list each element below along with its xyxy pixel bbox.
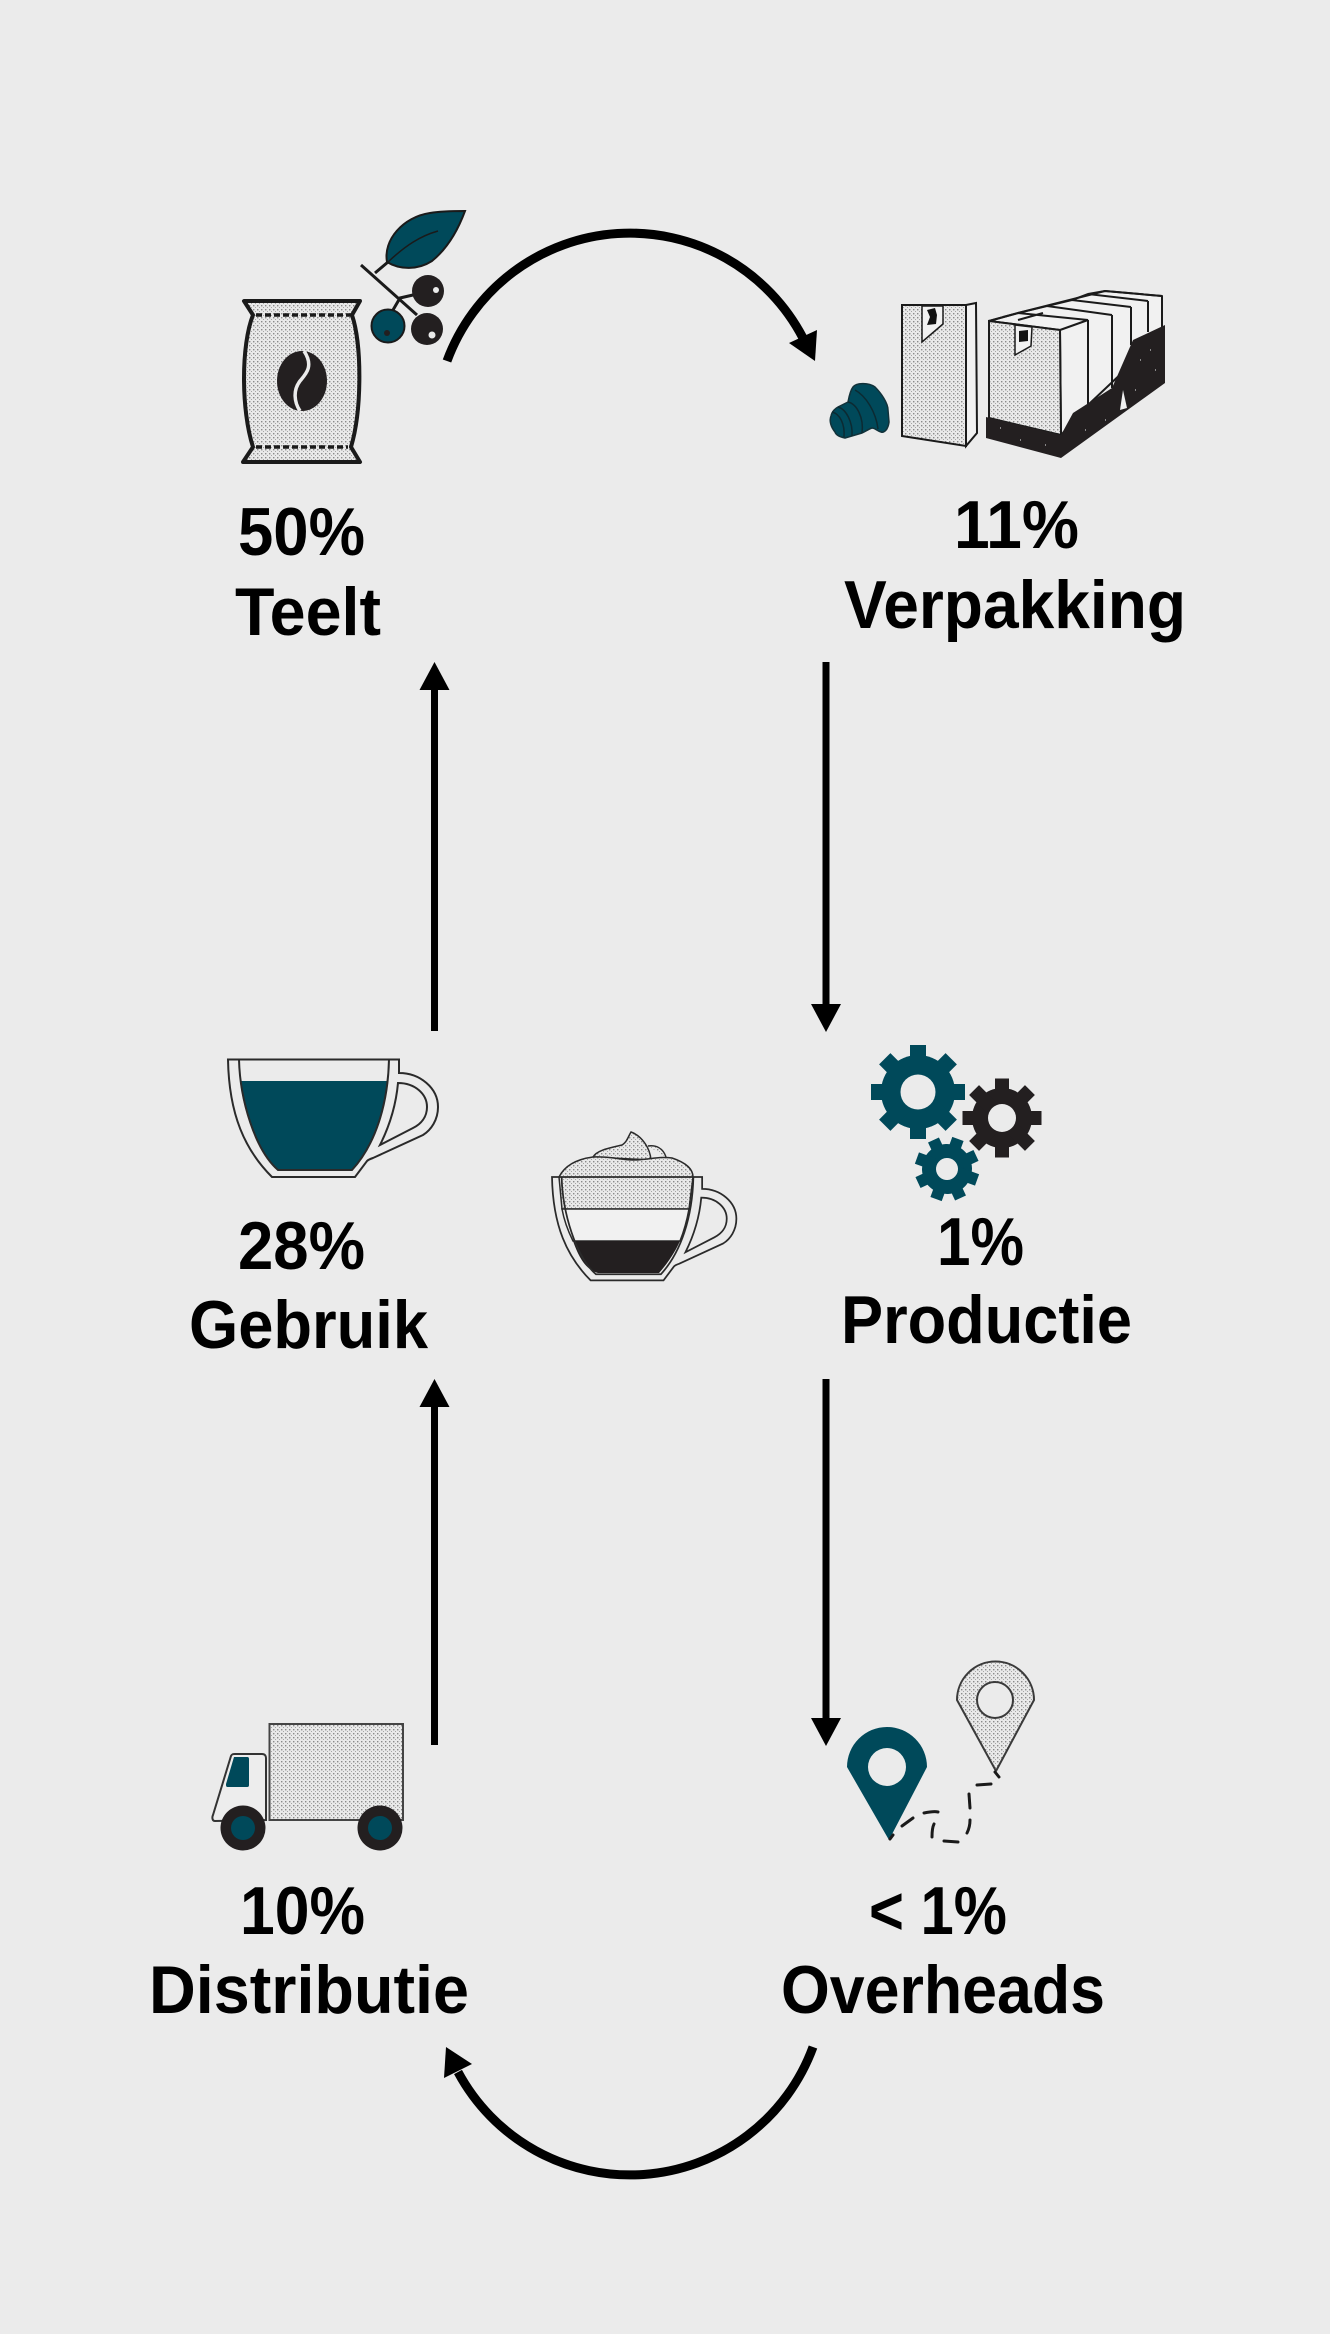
icon: coffee capsule [830, 384, 889, 438]
icon: single coffee box [902, 303, 977, 446]
label: 11%: 11% [954, 487, 1079, 563]
step: Verpakking [830, 291, 1186, 643]
icon: coffee bag [243, 301, 360, 462]
icon: cup of black coffee [228, 1060, 438, 1177]
icon: dark gear [962, 1078, 1042, 1158]
label: Overheads: Overheads [781, 1952, 1105, 2028]
step: Gebruik [189, 1060, 438, 1363]
step: Overheads [781, 1662, 1105, 2028]
arrow: Verpakking to Productie [811, 662, 841, 1032]
label: < 1%: < 1% [869, 1873, 1007, 1949]
label: Teelt: Teelt [235, 574, 381, 650]
icon: coffee branch with berries [361, 211, 465, 345]
icon: small teal gear [906, 1128, 988, 1210]
label: 10%: 10% [240, 1873, 365, 1949]
label: Verpakking: Verpakking [844, 567, 1186, 643]
icon: dashed route [890, 1772, 999, 1842]
icon: teal location pin [847, 1727, 927, 1840]
icon: tray of coffee boxes [986, 291, 1165, 458]
icon: grey location pin [957, 1662, 1034, 1771]
label: Gebruik: Gebruik [189, 1287, 428, 1363]
icon: central cappuccino cup [552, 1132, 736, 1280]
arrow: Gebruik to Teelt [420, 662, 450, 1031]
arrow: Overheads to Distributie [444, 2047, 813, 2175]
label: 50%: 50% [238, 494, 365, 570]
arrow: Distributie to Gebruik [420, 1379, 450, 1745]
label: 1%: 1% [937, 1204, 1024, 1280]
step: Productie [841, 1045, 1132, 1358]
step: Distributie [149, 1724, 469, 2028]
label: Distributie: Distributie [149, 1952, 469, 2028]
step: Teelt [235, 211, 465, 650]
icon: large teal gear [871, 1045, 965, 1139]
icon: delivery truck [212, 1724, 403, 1850]
arrow: Productie to Overheads [811, 1379, 841, 1746]
arrow: Teelt to Verpakking [447, 233, 817, 361]
label: 28%: 28% [238, 1208, 365, 1284]
label: Productie: Productie [841, 1282, 1132, 1358]
